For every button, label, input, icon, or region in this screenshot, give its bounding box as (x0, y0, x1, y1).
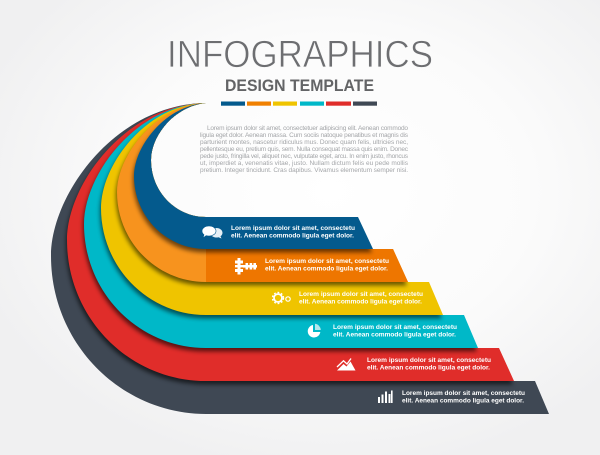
icon: bar chart (378, 390, 393, 403)
band: dark slate: Lorem ipsum dolor sit amet, consectetu (402, 390, 525, 397)
band: teal (84, 103, 478, 348)
icon: pie chart (308, 324, 321, 338)
band: red: elit. Aenean commodo ligula eget dolor. (367, 364, 490, 372)
shadow: red on dark slate (66, 106, 513, 384)
band: orange (117, 103, 408, 282)
band: orange: Lorem ipsum dolor sit amet, consectetu (265, 258, 389, 265)
band: blue: elit. Aenean commodo ligula eget dolor. (231, 232, 354, 240)
title: INFOGRAPHICS (167, 34, 433, 76)
intro paragraph: ut, imperdiet a, venenatis vitae, justo. Nullam dictum felis eu pede mollis (200, 160, 409, 167)
band: yellow: Lorem ipsum dolor sit amet, consectetu (299, 291, 423, 298)
icon: mountain line chart (337, 358, 356, 370)
band: red: Lorem ipsum dolor sit amet, consectetu (367, 357, 491, 364)
band: dark slate (51, 103, 549, 414)
colour key bars (221, 102, 377, 106)
band: yellow (101, 103, 443, 315)
shadow: blue on orange (133, 106, 372, 252)
icon: puzzle pieces (235, 258, 257, 274)
band: teal: elit. Aenean commodo ligula eget dolor. (333, 332, 456, 338)
band: teal: Lorem ipsum dolor sit amet, consectetu (333, 324, 457, 331)
icon: gears (272, 292, 290, 304)
icon: speech bubbles (202, 226, 222, 238)
band: dark slate: elit. Aenean commodo ligula eget dolor. (402, 398, 524, 404)
subtitle: DESIGN TEMPLATE (225, 76, 374, 95)
intro paragraph: ligula eget dolor. Aenean massa. Cum sociis natoque penatibus et magnis dis (200, 132, 409, 139)
intro paragraph: Lorem ipsum dolor sit amet, consectetuer adipiscing elit. Aenean commodo (207, 125, 408, 132)
band: orange: elit. Aenean commodo ligula eget dolor. (265, 266, 388, 272)
band: blue: Lorem ipsum dolor sit amet, consectetu (231, 225, 355, 232)
band: blue (134, 103, 373, 249)
intro paragraph: pede justo, fringilla vel, aliquet nec, vulputate eget, arcu. In enim justo, rhoncus (200, 153, 409, 160)
band: red (67, 103, 514, 381)
band: yellow: elit. Aenean commodo ligula eget dolor. (299, 298, 422, 306)
shadow: yellow on teal (100, 106, 442, 318)
intro paragraph (200, 125, 409, 174)
intro paragraph: pretium. Integer tincidunt. Cras dapibus. Vivamus elementum semper nisi. (200, 167, 408, 174)
intro paragraph: parturient montes, nascetur ridiculus mus. Donec quam felis, ultricies nec, (200, 139, 408, 146)
intro paragraph: pellentesque eu, pretium quis, sem. Nulla consequat massa quis enim. Donec (200, 146, 409, 153)
shadow: teal on red (83, 106, 477, 352)
shadow: orange on yellow (116, 106, 407, 286)
